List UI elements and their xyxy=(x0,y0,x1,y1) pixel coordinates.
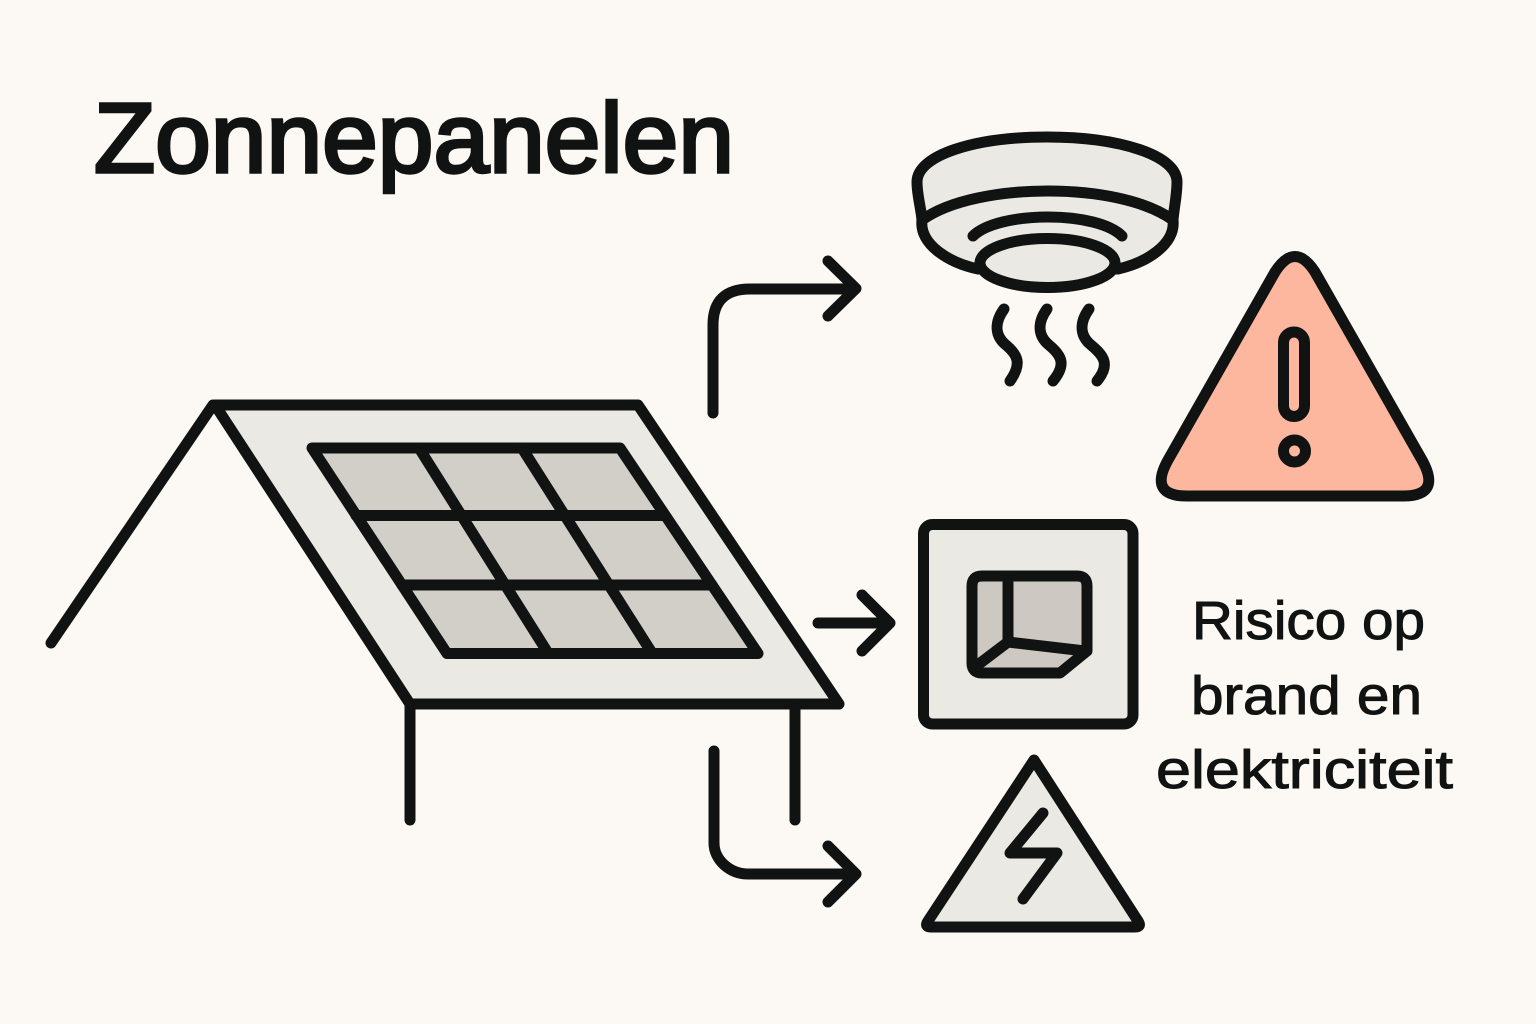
support post left xyxy=(404,704,416,820)
icon: smoke detector xyxy=(917,137,1177,381)
risk label: elektriciteit xyxy=(1156,740,1453,800)
arrow to junction box xyxy=(818,595,890,651)
solar panel roof illustration xyxy=(51,405,839,820)
arrow to electric warning xyxy=(714,751,856,902)
title: Zonnepanelen xyxy=(94,83,734,193)
roof surface xyxy=(215,405,839,704)
lightning bolt xyxy=(1010,813,1057,899)
exclamation mark xyxy=(1284,332,1304,416)
detector body xyxy=(917,137,1177,269)
icon: fire warning triangle xyxy=(1161,256,1429,496)
roof left slope xyxy=(51,405,213,643)
detector band xyxy=(922,191,1173,220)
icon: junction box xyxy=(924,524,1133,724)
risk label xyxy=(1156,591,1453,800)
support post right xyxy=(790,704,800,820)
box cube xyxy=(972,576,1087,673)
risk label: brand en xyxy=(1191,666,1422,726)
detector inner ring xyxy=(973,217,1122,236)
icon: high voltage triangle xyxy=(927,760,1139,927)
arrow to smoke detector xyxy=(713,261,856,413)
smoke waves xyxy=(997,309,1017,381)
solar panel grid xyxy=(312,448,758,654)
detector sensor xyxy=(980,238,1115,288)
risk label: Risico op xyxy=(1192,591,1425,651)
